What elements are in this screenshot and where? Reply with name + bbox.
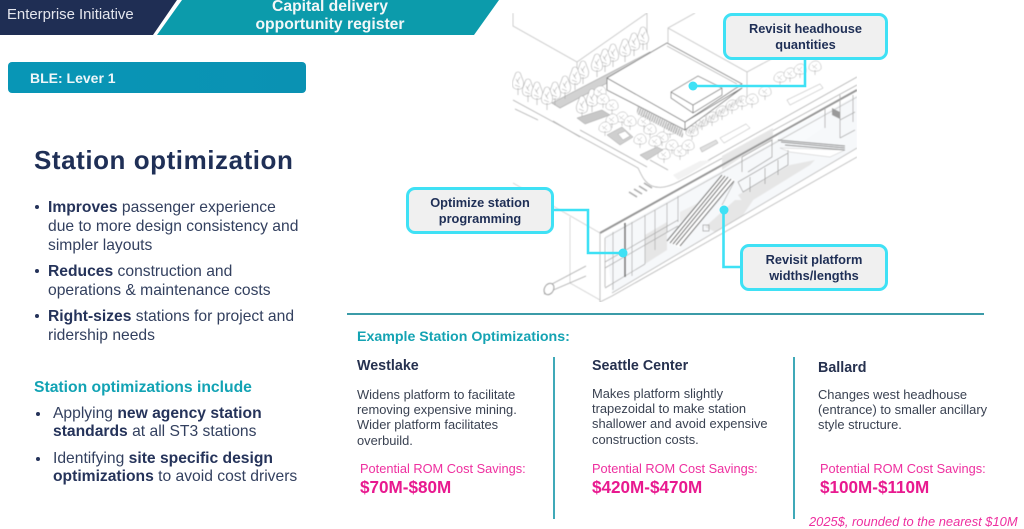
footnote: 2025$, rounded to the nearest $10M [809,514,1018,529]
diagonal walkway [552,52,660,108]
savings label: Potential ROM Cost Savings: [820,461,986,476]
bullet: reduces: operations & maintenance costs [48,282,271,299]
subheading: Station optimizations include [34,378,252,396]
example: Ballard [818,360,987,496]
header banner [0,0,499,35]
streetscape [513,77,857,187]
savings amount: $100M-$110M [820,478,929,496]
bullet: agency standards [36,404,262,440]
description: Changes west headhouse [818,386,967,402]
description: trapezoidal to make station [592,401,746,416]
callout: platform widths: Revisit platform [766,252,862,267]
upper mezzanine [738,140,788,192]
bullet: right-sizes: ridership needs [48,327,155,344]
description: overbuild. [357,433,413,448]
description: Wider platform facilitates [357,417,498,432]
trees [512,27,821,163]
callout: headhouse quantities: quantities [775,36,836,52]
callout: headhouse quantities [723,13,888,60]
lever badge [8,62,306,93]
bullet: site specific: optimizations to avoid cost drivers [53,468,297,485]
examples top rule [347,313,984,314]
bullet: improves: due to more design consistency and [48,218,298,235]
lower escalator [668,175,735,248]
name: Westlake [357,358,419,374]
examples heading: Example Station Optimizations: [357,329,570,345]
bullet: agency standards: standards at all ST3 stations [53,423,256,440]
section interior [605,95,857,293]
bullet: reduces: Reduces construction and [48,263,232,280]
bullet: site specific [36,450,297,485]
callout: platform widths [740,244,888,291]
description [357,386,517,448]
callout: headhouse quantities: Revisit headhouse [749,21,862,36]
top slab [600,90,857,233]
upper escalator [780,148,845,157]
savings amount: $70M-$80M [360,478,451,496]
teal tab [157,0,499,35]
connector: programming [552,210,628,258]
lever label: BLE: Lever 1 [30,70,116,86]
drawing group [512,13,857,302]
bullet: improves: simpler layouts [48,237,152,254]
callout: station programming [406,187,554,234]
bullet: site specific: Identifying site specific design [53,450,273,466]
rooftop box [671,76,722,113]
savings label: Potential ROM Cost Savings: [592,461,758,476]
example: Westlake [357,358,526,496]
description: removing expensive mining. [357,402,517,417]
capital delivery title [255,0,405,33]
description: Makes platform slightly [592,386,723,400]
surrounding buildings [513,13,803,97]
tunnel tube [544,266,586,294]
name: Seattle Center [592,358,688,374]
floors [605,196,678,290]
description: construction costs. [592,432,699,447]
bullet: agency standards: Applying new agency station [53,404,262,422]
description: shallower and avoid expensive [592,416,768,431]
benefits list [35,199,298,344]
description: style structure. [818,417,902,432]
description [592,386,768,447]
plaza planters [577,84,823,160]
enterprise initiative label: Enterprise Initiative [7,7,134,23]
description [818,386,987,432]
hanging canopy hatch [637,106,683,138]
bullet: right-sizes: Right-sizes stations for project and [48,308,294,325]
bullet: improves [35,199,298,254]
connector: headhouse [688,58,805,90]
name: Ballard [818,360,866,376]
connector: platform [720,206,742,267]
bullet: improves: Improves passenger experience [48,199,276,216]
outer walls [600,148,857,302]
bullet: reduces [35,263,271,299]
description: (entrance) to smaller ancillary [818,402,987,417]
heading: Station optimization [34,145,293,175]
crosswalk [629,183,652,197]
bullet: right-sizes [35,308,294,344]
description: Widens platform to facilitate [357,386,515,402]
divider right [793,357,794,519]
main headhouse [607,43,742,130]
exterior ghost walls [513,183,600,300]
navy tab [0,0,177,35]
station section box [513,90,857,302]
callout: platform widths: widths/lengths [769,268,859,282]
callout: station programming: Optimize station [430,195,530,210]
example: Seattle Center [592,358,768,496]
capital delivery title: opportunity register [255,16,405,33]
savings amount: $420M-$470M [592,478,702,496]
callout: station programming: programming [439,210,521,226]
savings label: Potential ROM Cost Savings: [360,461,526,476]
divider left [553,357,554,519]
station isometric illustration [512,13,857,302]
includes list [36,404,297,485]
